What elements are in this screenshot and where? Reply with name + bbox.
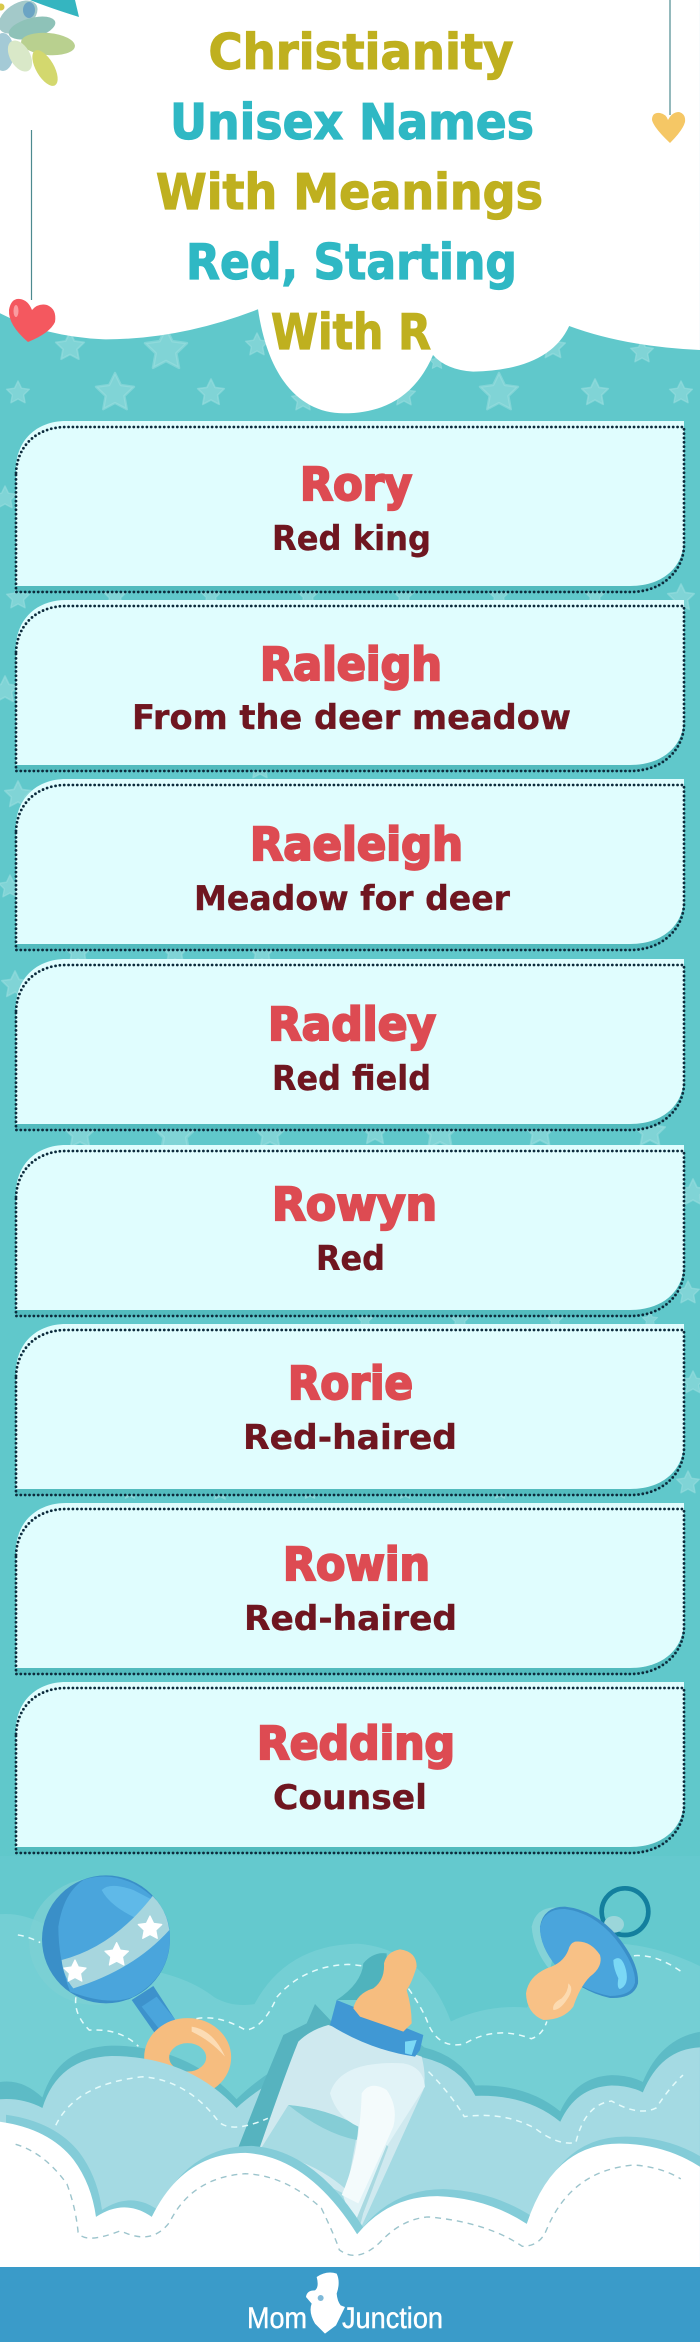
- meaning: Meadow for deer: Meadow for deer: [194, 879, 510, 919]
- name: Radley: Radley: [268, 998, 436, 1051]
- meaning: Red-haired: Red-haired: [244, 1599, 457, 1639]
- meaning: Red-haired: Red-haired: [243, 1418, 457, 1458]
- icon: pacifier: [526, 1888, 648, 2020]
- title: Red, Starting: [186, 234, 517, 291]
- back cloud layer: [0, 1914, 700, 2267]
- cloud layer light: [0, 2047, 700, 2267]
- name: Raeleigh: Raeleigh: [250, 818, 463, 871]
- panel: Radley card: [16, 959, 684, 1130]
- title: With Meanings: [156, 164, 543, 221]
- name: Rowyn: Rowyn: [272, 1178, 437, 1231]
- meaning: Red: Red: [316, 1239, 385, 1279]
- icon: rattle: [29, 1875, 225, 2084]
- dashed stitching on white cloud: [16, 2144, 681, 2255]
- logo: MomJunction: Mom: [247, 2302, 307, 2335]
- title: Christianity: [208, 24, 514, 81]
- title: [156, 24, 543, 361]
- title: Unisex Names: [170, 94, 534, 151]
- meaning: Counsel: Counsel: [273, 1778, 427, 1818]
- dashed stitching upper: [18, 1935, 681, 2046]
- icon: red hanging heart: [9, 130, 55, 342]
- title: With R: [271, 304, 431, 361]
- meaning: Red field: Red field: [272, 1059, 431, 1099]
- icon: mother and child: [306, 2273, 345, 2334]
- front white cloud: [0, 2122, 700, 2267]
- bunting corner: [30, 0, 79, 17]
- front cloud band: [6, 2115, 700, 2260]
- panel: Raeleigh card: [16, 779, 684, 950]
- name: Rory: Rory: [300, 458, 412, 511]
- panel: Rowin card: [16, 1503, 684, 1674]
- bottom lower background: [0, 1856, 700, 2156]
- panel: Raleigh card: [16, 600, 684, 771]
- icon: watercolor leaves: [0, 0, 76, 90]
- name: Rowin: Rowin: [283, 1538, 430, 1591]
- dashed stitching on cloud: [56, 2072, 683, 2143]
- logo: MomJunction: Junction: [342, 2302, 443, 2335]
- panel: Rory card: [16, 421, 684, 592]
- name: Raleigh: Raleigh: [260, 638, 442, 691]
- panel: Redding card: [16, 1682, 684, 1853]
- meaning: From the deer meadow: From the deer meadow: [132, 698, 571, 738]
- logo: MomJunction: [247, 2273, 443, 2335]
- star pattern background: [0, 328, 700, 1499]
- panel: Rorie card: [16, 1324, 684, 1495]
- name: Rorie: Rorie: [288, 1357, 413, 1410]
- cloud band dark: [0, 2028, 700, 2267]
- footer bar: [0, 2267, 700, 2342]
- icon: yellow hanging heart: [652, 0, 685, 143]
- meaning: Red king: Red king: [272, 519, 431, 559]
- icon: baby bottle: [237, 1949, 425, 2233]
- panel: Rowyn card: [16, 1145, 684, 1316]
- top white cloud: [0, 0, 700, 413]
- name: Redding: Redding: [257, 1717, 455, 1770]
